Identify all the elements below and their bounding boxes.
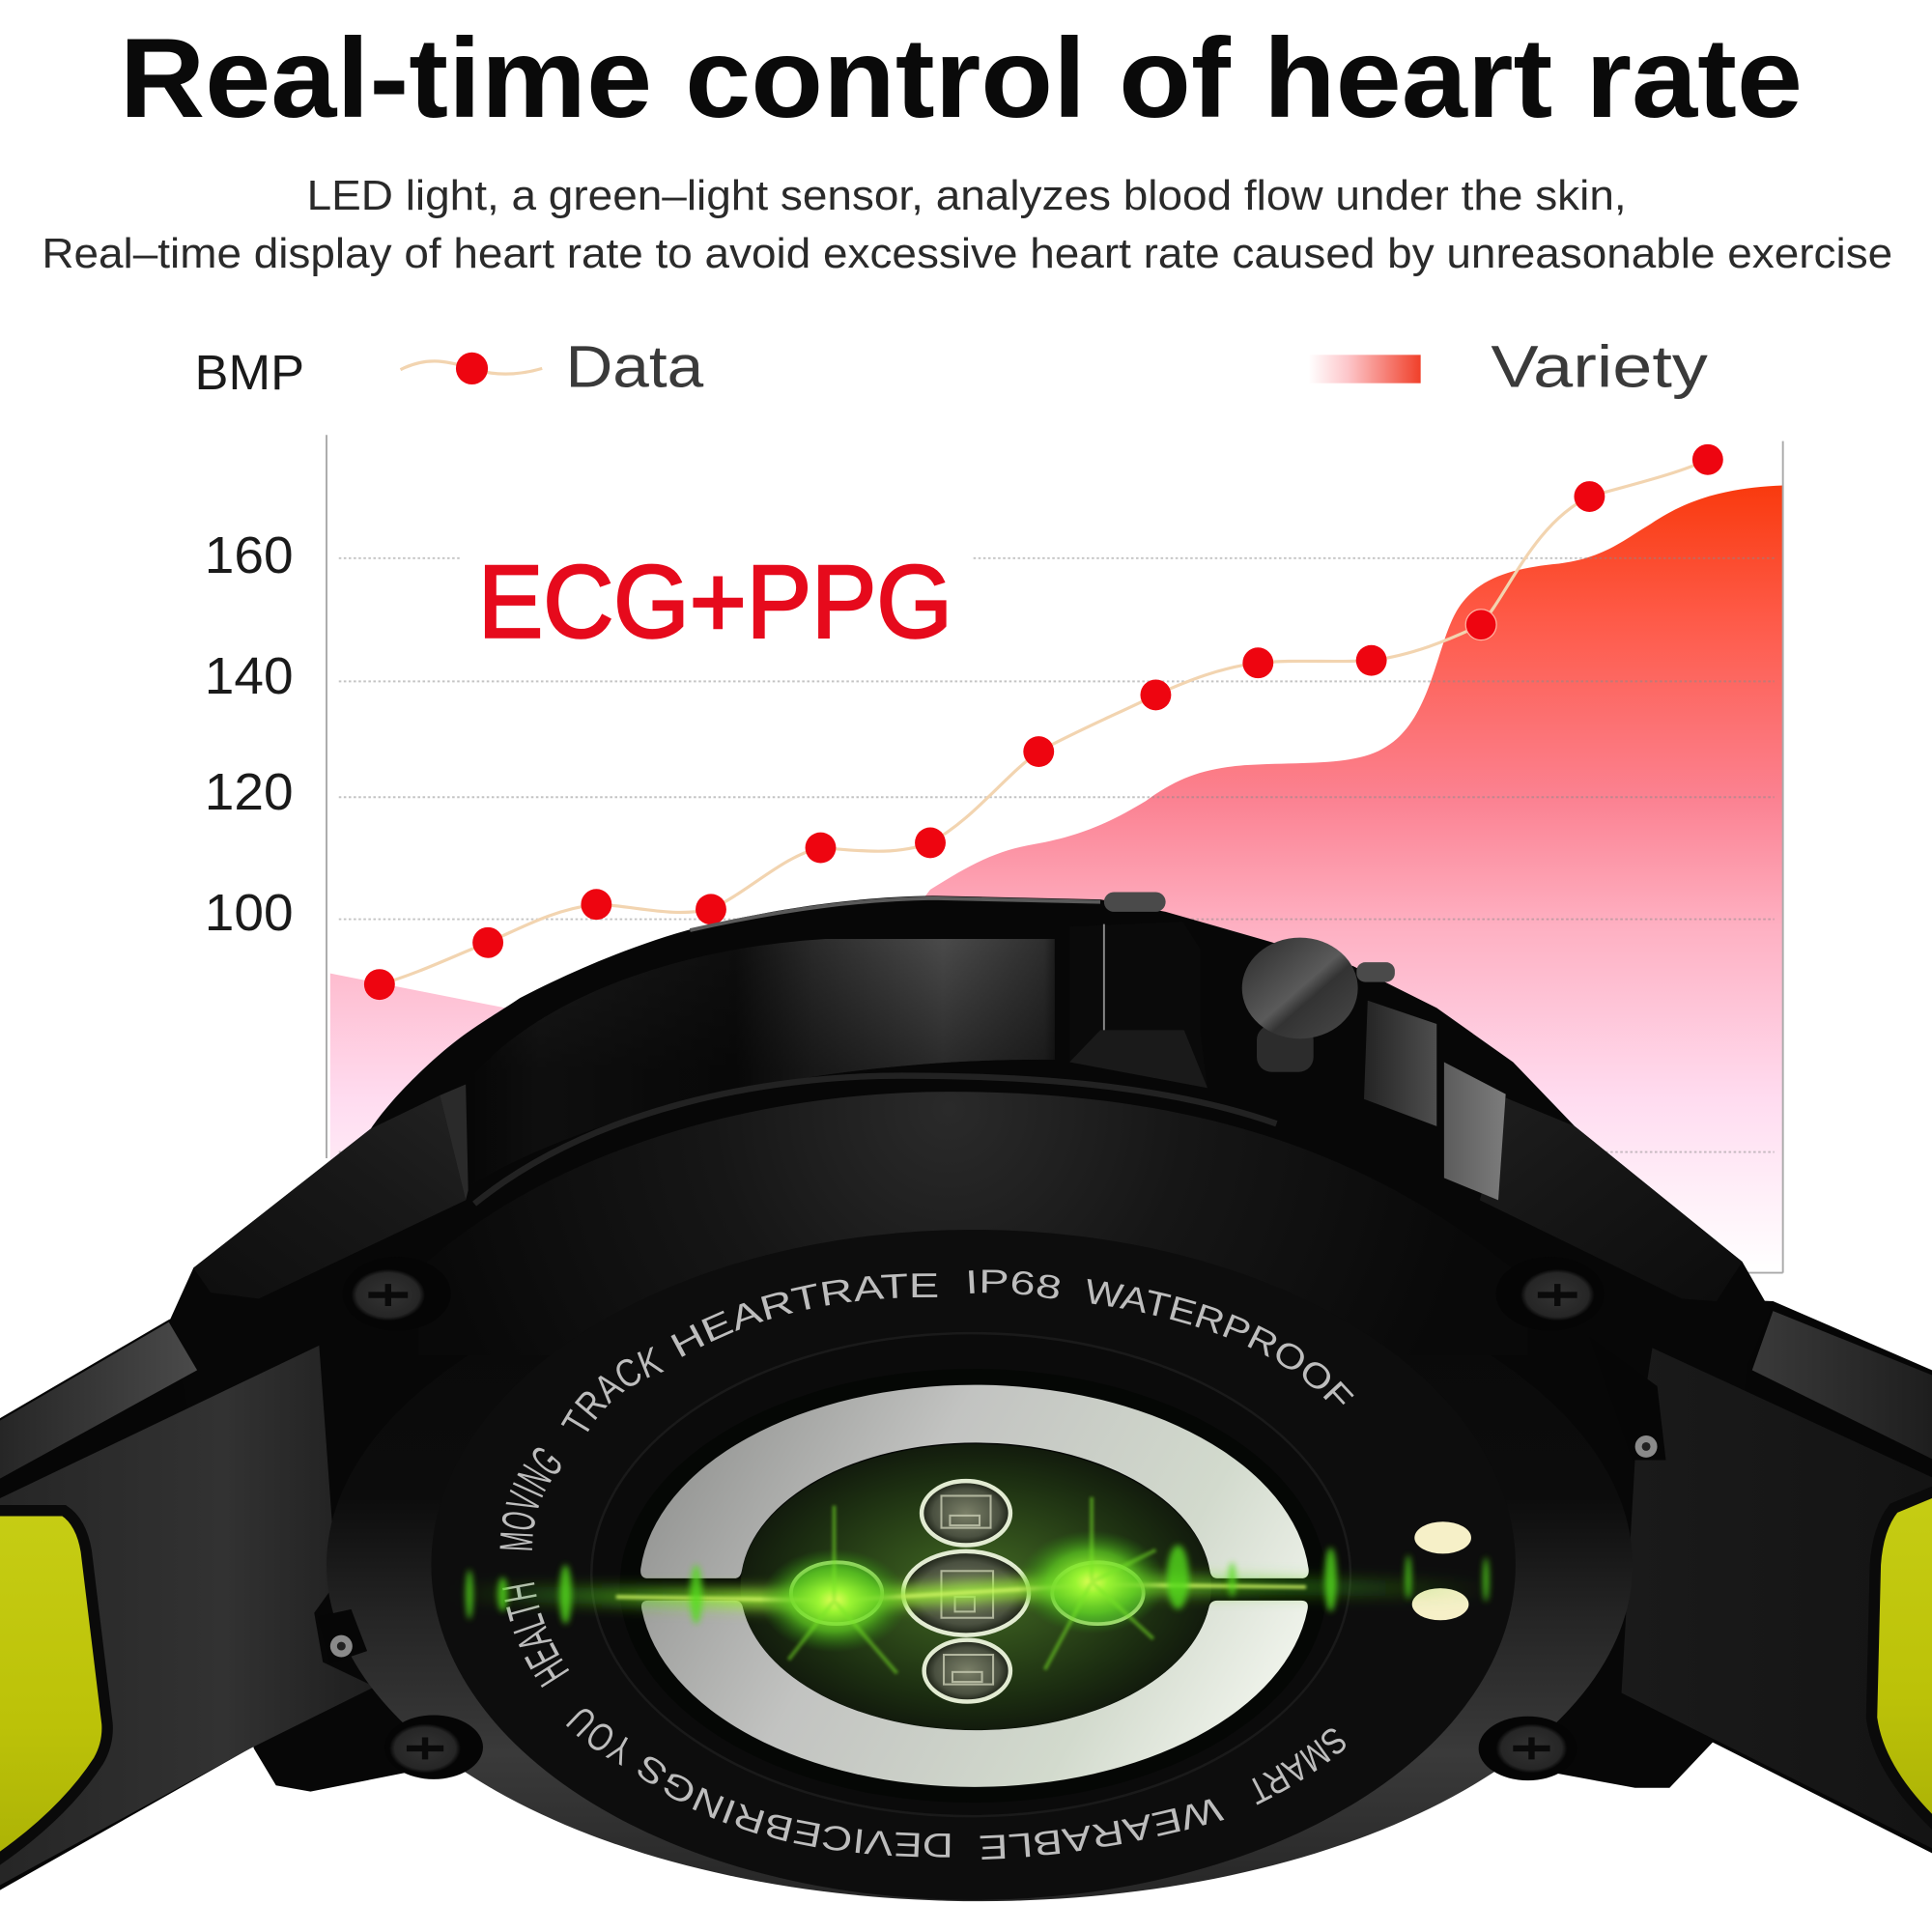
y axis labels: 140 [205,648,294,705]
side tower [1069,922,1208,1088]
data line [380,460,1708,984]
y axis labels: 120 [205,764,294,821]
chart legend: BMP [195,345,304,400]
charging pins [1412,1521,1471,1620]
right side panels [1364,1001,1506,1200]
strap backing [0,1233,1932,1890]
right strap [1622,1311,1932,1848]
ECG+PPG label: ECG+PPG [478,543,952,659]
data points [364,444,1723,1000]
silver ring [640,1385,1309,1787]
smartwatch [0,893,1932,1901]
ring lettering: IP68 [969,1269,1060,1298]
ring lettering: TRACK [560,1347,665,1432]
subtitle text block: LED light, a green–light sensor, analyzes blood flow under the skin, [307,173,1627,219]
y axis labels: 160 [205,527,294,584]
ring lettering: HEARTRATE [670,1273,937,1357]
side buttons [1104,892,1395,982]
chart axes [327,435,1783,1273]
back cover text ring [431,1230,1516,1900]
variety area [330,486,1783,1273]
left lug [193,1084,469,1298]
ring lettering: HEALTH [502,1582,570,1688]
subtitle text block [42,173,1892,277]
case upper band [466,939,1055,1188]
bezel highlight [690,898,1100,930]
ring lettering: WATERPROOF [1088,1279,1354,1405]
ridge [474,1076,1276,1204]
chart legend [195,334,1708,400]
ring lettering: MOVING [500,1447,560,1550]
grid lines [339,558,1775,1152]
left yellow insert [0,1511,107,1866]
right yellow insert [1872,1488,1932,1833]
screws [343,1257,1605,1780]
ring lettering: WEARABLE [980,1799,1225,1860]
ring lettering: YOU [566,1709,628,1766]
subtitle text block: Real–time display of heart rate to avoid excessive heart rate caused by unreasonable exercise [42,231,1892,277]
heart rate chart [195,334,1783,1273]
back cover outer disc [327,1229,1633,1901]
sensor recess [591,1333,1350,1816]
left strap [0,1322,375,1886]
title: Real-time control of heart rate [120,14,1803,141]
chart legend: Data [565,334,704,400]
crown [1242,938,1358,1072]
sensors [791,1481,1144,1701]
strap pins [318,1337,1665,1663]
green light glow [456,1497,1491,1673]
sensor window [741,1444,1211,1730]
y axis labels: 100 [205,885,294,942]
right lug [1480,1097,1743,1301]
ring lettering: DEVICEBRINGS [638,1756,951,1858]
watch case silhouette [170,895,1771,1792]
case band shading [466,939,1055,1188]
y axis labels [205,527,294,942]
upper shoulder [419,1092,1528,1355]
chart legend: Variety [1491,334,1708,400]
ring lettering [500,1269,1354,1860]
ring lettering: SMART [1252,1729,1346,1804]
